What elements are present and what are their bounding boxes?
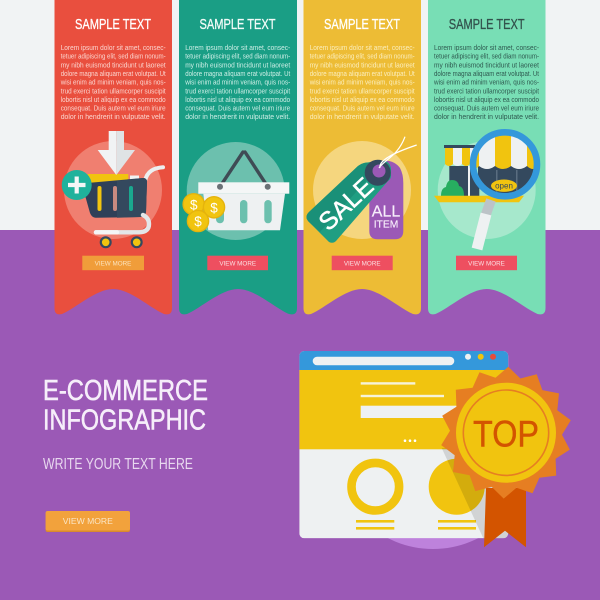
icon: coins: $ [210, 200, 218, 215]
text block: mint panel: dolor in hendrerit in vulputate velit. [434, 114, 539, 121]
button: yellow panel: VIEW MORE [344, 260, 381, 267]
title [43, 375, 208, 436]
button: mint panel [456, 256, 517, 270]
icon: sale tags: ALL [372, 204, 400, 221]
text block: mint panel: tetuer adipiscing elit, sed diam nonum- [434, 54, 540, 61]
title: E-COMMERCE [43, 375, 208, 407]
text block: mint panel: dolore magna aliquam erat volutpat. Ut [434, 71, 539, 78]
text block: green panel: Lorem ipsum dolor sit amet, consec- [185, 45, 291, 52]
icon: sale tags: ITEM [374, 220, 398, 231]
button: yellow panel [332, 256, 393, 270]
title: INFOGRAPHIC [43, 404, 206, 436]
button: red panel [82, 256, 144, 270]
text block: red panel: dolor in hendrerit in vulputate velit. [61, 114, 166, 121]
button: mint panel: VIEW MORE [468, 260, 505, 267]
text block: red panel: tetuer adipiscing elit, sed diam nonum- [61, 54, 166, 61]
heading: yellow panel: SAMPLE TEXT [324, 17, 400, 33]
heading: mint panel: SAMPLE TEXT [449, 17, 525, 33]
illustration: browser window with badge [299, 351, 571, 549]
text block: mint panel: my nibh euismod tincidunt ut laoreet [434, 62, 539, 69]
button: main view more: VIEW MORE [63, 516, 113, 526]
text block: green panel: dolor in hendrerit in vulputate velit. [185, 114, 290, 121]
text block: red panel: my nibh euismod tincidunt ut laoreet [61, 62, 166, 69]
icon: shopping cart [62, 131, 163, 248]
icon: sale tags [306, 137, 417, 243]
text block: green panel: dolore magna aliquam erat volutpat. Ut [185, 71, 290, 78]
text block: mint panel [433, 45, 540, 121]
text block: yellow panel: dolore magna aliquam erat volutpat. Ut [310, 71, 415, 78]
text block: red panel: wisi enim ad minim veniam, quis nos- [60, 80, 166, 87]
text block: mint panel: consequat. Duis autem vel eum iriure [434, 106, 539, 113]
text block: mint panel: wisi enim ad minim veniam, quis nos- [433, 80, 540, 87]
text block: mint panel: Lorem ipsum dolor sit amet, consec- [434, 45, 540, 52]
text block: yellow panel: trud exerci tation ullamcorper suscipit [310, 88, 415, 95]
ribbon [484, 488, 526, 547]
icon: magnifier handle [477, 200, 491, 249]
panel: mint shop [428, 0, 546, 314]
sign: open: open [495, 181, 513, 190]
text block: yellow panel: wisi enim ad minim veniam, quis nos- [309, 80, 415, 87]
button: red panel: VIEW MORE [95, 260, 131, 267]
text block: yellow panel: my nibh euismod tincidunt ut laoreet [310, 62, 415, 69]
text block: red panel: dolore magna aliquam erat volutpat. Ut [61, 71, 166, 78]
button: green panel: VIEW MORE [219, 260, 256, 267]
text block: green panel: wisi enim ad minim veniam, quis nos- [184, 80, 291, 87]
text block: yellow panel: dolor in hendrerit in vulputate velit. [310, 114, 415, 121]
icon: coins: $ [194, 214, 202, 229]
text block: yellow panel: lobortis nisl ut aliquip ex ea commodo [310, 97, 415, 104]
panel: red cart [54, 0, 172, 314]
text block: yellow panel: consequat. Duis autem vel eum iriure [310, 106, 415, 113]
icon: basket with coins [183, 142, 289, 240]
text block: red panel: lobortis nisl ut aliquip ex ea commodo [61, 97, 166, 104]
icon: coins: $ [190, 197, 198, 212]
text block: yellow panel: Lorem ipsum dolor sit amet, consec- [310, 45, 415, 52]
button: green panel [207, 256, 268, 270]
icon: sale tags: SALE [313, 172, 379, 236]
badge: top: TOP [473, 414, 539, 455]
heading: green panel: SAMPLE TEXT [200, 17, 276, 33]
text block: red panel: consequat. Duis autem vel eum iriure [61, 106, 166, 113]
text block: green panel: trud exerci tation ullamcorper suscipit [185, 88, 290, 95]
badge: top [441, 367, 571, 547]
heading: red panel: SAMPLE TEXT [75, 17, 151, 33]
icon: coins [183, 194, 225, 232]
browser window [299, 351, 509, 538]
text block: green panel: tetuer adipiscing elit, sed diam nonum- [185, 54, 291, 61]
text block: red panel [60, 45, 166, 121]
button: main view more [46, 511, 130, 532]
text block: yellow panel [309, 45, 415, 121]
text block: mint panel: lobortis nisl ut aliquip ex ea commodo [434, 97, 539, 104]
text block: green panel [184, 45, 291, 121]
text block: green panel: consequat. Duis autem vel eum iriure [185, 106, 290, 113]
panel: yellow sale tag [304, 0, 421, 314]
text block: mint panel: trud exerci tation ullamcorper suscipit [434, 88, 539, 95]
text block: green panel: lobortis nisl ut aliquip ex ea commodo [185, 97, 290, 104]
text block: green panel: my nibh euismod tincidunt ut laoreet [185, 62, 290, 69]
subtitle: WRITE YOUR TEXT HERE [43, 456, 193, 473]
icon: shop under magnifier [434, 130, 540, 249]
panel: green basket [179, 0, 297, 314]
text block: red panel: trud exerci tation ullamcorper suscipit [61, 88, 166, 95]
text block: yellow panel: tetuer adipiscing elit, sed diam nonum- [310, 54, 415, 61]
text block: red panel: Lorem ipsum dolor sit amet, consec- [61, 45, 166, 52]
